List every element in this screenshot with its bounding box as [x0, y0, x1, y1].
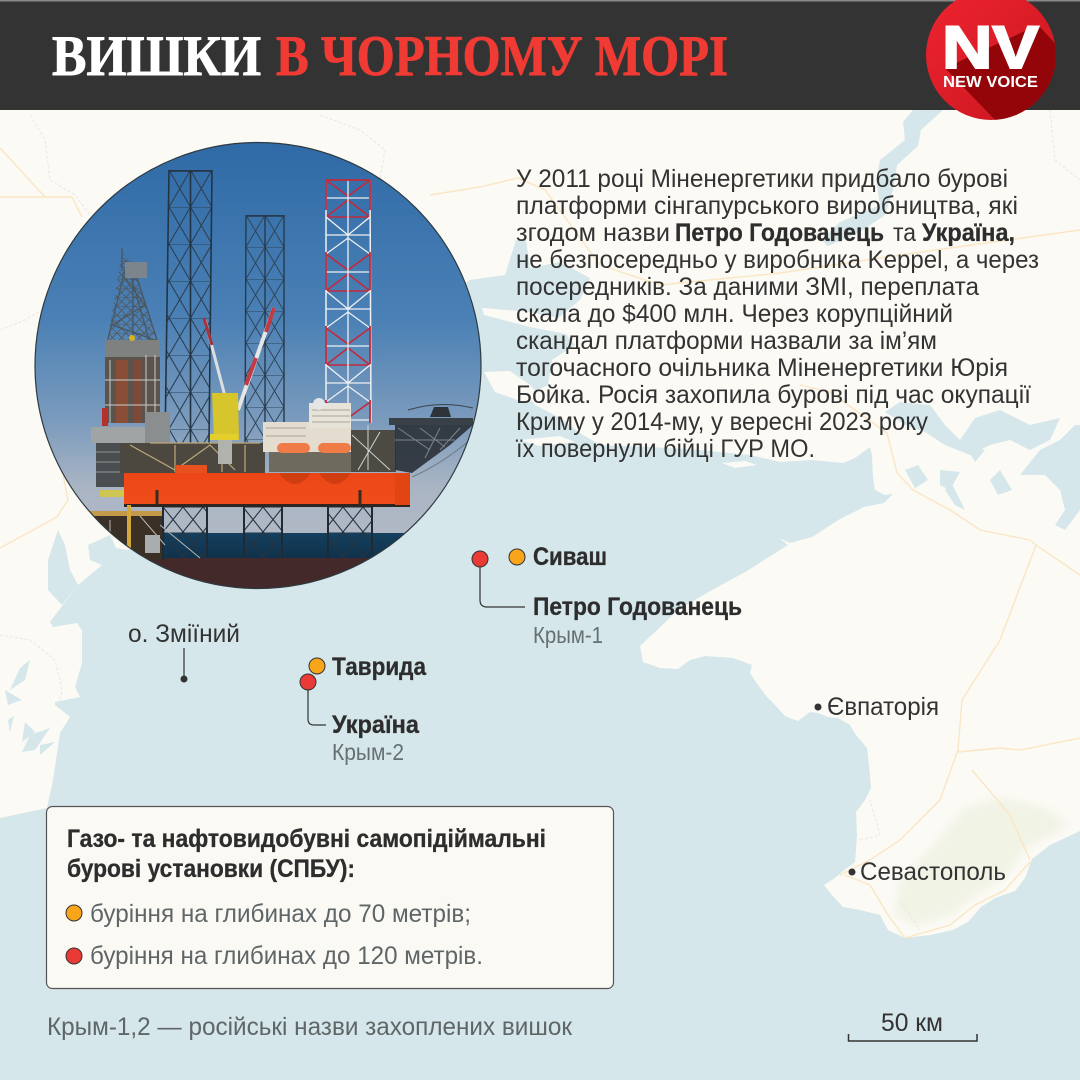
description text block: У 2011 році Міненергетики придбало бурові — [516, 165, 1008, 193]
footnote: Крым-1,2 — російські назви захоплених вишок — [47, 1013, 573, 1041]
Syvash lagoons — [885, 402, 1080, 530]
title: ВИШКИ — [52, 25, 261, 88]
description text block: посередників. За даними ЗМІ, переплата — [516, 273, 979, 301]
logo: NV New Voice: NV — [942, 14, 1039, 81]
description text block: їх повернули бійці ГУР МО. — [515, 435, 815, 463]
roads — [0, 148, 1080, 938]
Dnipro river and limans — [822, 110, 943, 246]
description text block: Криму у 2014-му, у вересні 2023 року — [516, 408, 928, 436]
city: Євпаторія: Євпаторія — [827, 693, 939, 721]
description text block: Бойка. Росія захопила бурові під час окупації — [516, 381, 1031, 409]
description text block: скандал платформи назвали за ім’ям — [516, 327, 937, 355]
legend heading: Газо- та нафтовидобувні самопідіймальні — [67, 825, 546, 853]
description text block: та — [893, 219, 916, 247]
superstructure — [263, 398, 396, 472]
cranes — [204, 308, 274, 464]
legend panel — [46, 806, 614, 988]
orange hull — [124, 473, 410, 507]
mountains of southern Crimea — [895, 798, 1070, 925]
marker: Сиваш — [509, 543, 607, 571]
marker: Україна (Крым-2): Україна — [332, 711, 420, 739]
derrick — [91, 248, 170, 497]
marker: Петро Годованець (Крым-1) — [472, 551, 742, 648]
header bar — [0, 0, 1080, 110]
title: В ЧОРНОМУ МОРІ — [276, 25, 728, 88]
faint borders — [0, 110, 1080, 930]
description text block: згодом назви — [516, 219, 670, 247]
marker: Україна (Крым-2) — [300, 674, 420, 765]
islands — [484, 371, 757, 468]
description text block: скала до $400 млн. Через корупційний — [516, 300, 953, 328]
deck machinery — [120, 443, 265, 474]
description text block — [515, 165, 1039, 463]
scale bar: 50 km — [848, 1009, 977, 1041]
description text block: Україна, — [922, 219, 1015, 247]
city: Севастополь: Севастополь — [860, 858, 1006, 886]
legend heading — [67, 825, 546, 883]
legs — [165, 170, 371, 443]
label: о. Зміїний: о. Зміїний — [128, 620, 240, 648]
label: о. Зміїний — [128, 620, 240, 682]
description text block: не безпосередньо у виробника Keppel, а через — [516, 246, 1039, 274]
marker: Сиваш: Сиваш — [533, 543, 607, 571]
logo: NV New Voice: NEW VOICE — [943, 74, 1038, 91]
scale bar: 50 km: 50 км — [881, 1009, 943, 1037]
photo: jack-up drilling rig in a circle — [30, 140, 486, 590]
marker: Петро Годованець (Крым-1): Крым-1 — [533, 622, 603, 648]
lower legs and lower structure — [80, 505, 372, 560]
title — [52, 25, 728, 88]
land mass — [0, 110, 1080, 938]
description text block: Петро Годованець — [675, 219, 884, 247]
helideck — [389, 404, 473, 477]
legend item: orange: буріння на глибинах до 70 метрів; — [90, 900, 471, 928]
logo: NV New Voice — [926, 0, 1056, 120]
description text block: платформи сінгапурського виробництва, які — [516, 192, 1018, 220]
marker: Таврида: Таврида — [332, 653, 427, 681]
marker: Петро Годованець (Крым-1): Петро Годованець — [533, 593, 742, 621]
marker: Україна (Крым-2): Крым-2 — [332, 739, 404, 765]
legend heading: бурові установки (СПБУ): — [67, 855, 355, 883]
legend item: red: буріння на глибинах до 120 метрів. — [90, 942, 483, 970]
description text block: тогочасного очільника Міненергетики Юрія — [516, 354, 1008, 382]
